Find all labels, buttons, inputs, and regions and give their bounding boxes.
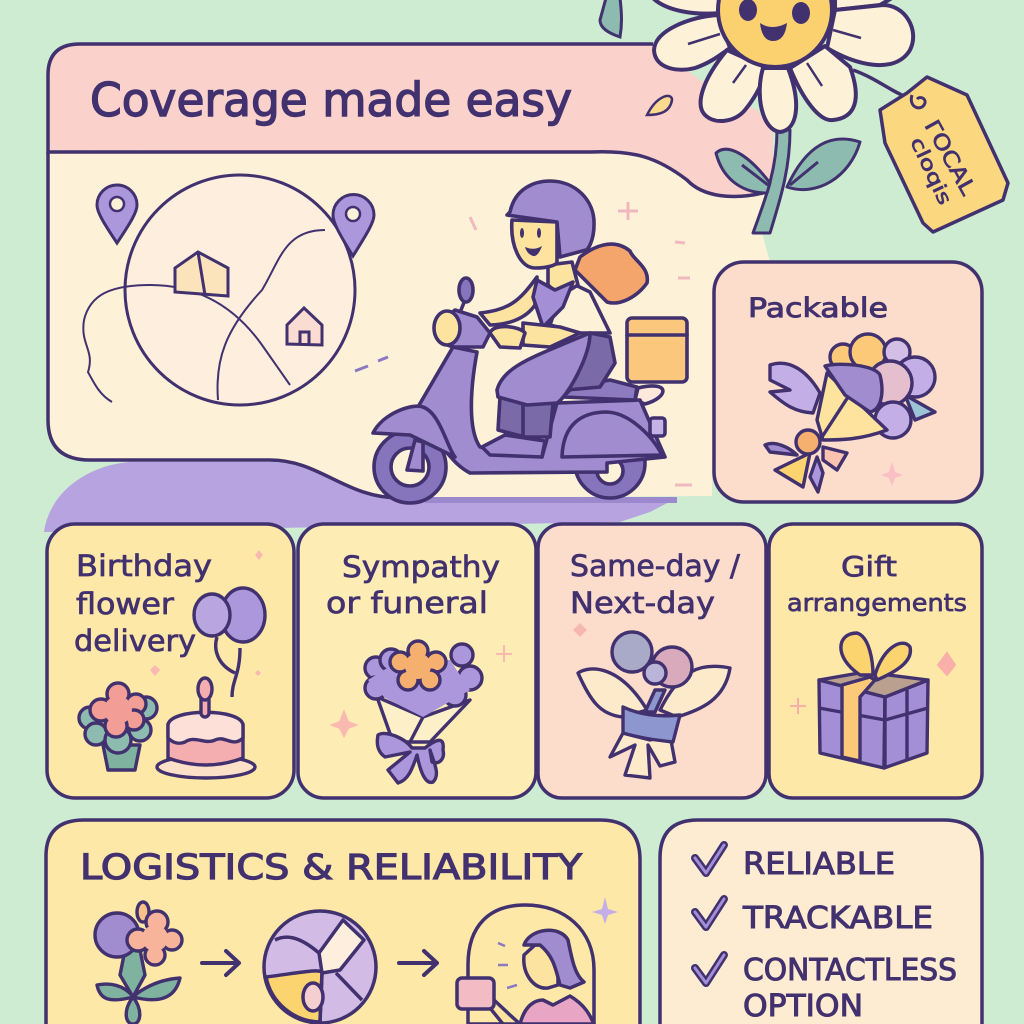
sparkles <box>332 645 512 736</box>
delivery box <box>627 318 687 382</box>
front fork <box>407 440 423 471</box>
icon: map pin left <box>97 185 137 243</box>
panel: packable <box>714 262 982 502</box>
tag text second line: cloqis <box>905 134 956 208</box>
icon: gift box <box>819 633 928 768</box>
sparkles <box>150 550 263 676</box>
icon: balloons <box>194 588 265 697</box>
flower face <box>718 0 832 67</box>
scooter body <box>418 347 665 473</box>
icon: bouquet <box>765 334 935 492</box>
label: delivery <box>74 624 196 658</box>
purple road swoosh <box>44 462 677 532</box>
panel: gift arrangements <box>769 524 982 798</box>
header band <box>48 44 773 197</box>
rear fender <box>562 412 662 457</box>
label: arrangements <box>787 589 967 617</box>
petal lines <box>688 30 861 86</box>
check item: contactless option <box>695 953 957 1024</box>
icon: winged bouquet <box>578 632 730 778</box>
map circle <box>83 175 355 405</box>
arrow <box>202 951 239 975</box>
tag text: ΓOCAL <box>920 116 981 199</box>
panel: birthday flower delivery <box>47 524 294 798</box>
headlight <box>434 311 460 345</box>
label: flower <box>76 587 174 621</box>
helmet <box>507 181 594 257</box>
hair <box>575 244 647 303</box>
hand <box>490 327 525 348</box>
label: or funeral <box>326 586 488 620</box>
scooter wheels <box>374 428 645 503</box>
eyes and smile <box>520 228 542 256</box>
panel: coverage map and courier <box>48 44 773 503</box>
icon: birthday cake <box>157 678 255 778</box>
icon: falling petal <box>647 96 672 115</box>
icon: house large <box>175 252 228 296</box>
stem and leaves <box>716 130 860 233</box>
sparkles <box>790 653 955 714</box>
check item: trackable: TRACKABLE <box>742 901 933 936</box>
dashed route <box>355 357 388 371</box>
mirror <box>459 278 473 310</box>
label: Next-day <box>570 586 715 620</box>
panel: sympathy or funeral <box>298 524 536 798</box>
apron <box>533 280 573 327</box>
icon: daisy mascot <box>650 0 913 233</box>
label: Birthday <box>76 549 212 583</box>
rider dark trousers <box>567 333 615 390</box>
sparkle <box>881 462 903 486</box>
scooter handlebar <box>438 310 490 347</box>
back arm <box>480 277 537 325</box>
scooter and rider <box>373 181 687 503</box>
icon: sympathy bouquet <box>365 641 482 783</box>
check item: contactless option: CONTACTLESS <box>743 953 957 988</box>
label: Sympathy <box>342 550 500 584</box>
front fender <box>373 406 455 457</box>
panel: same-day / next-day <box>538 524 766 798</box>
check item: reliable <box>695 845 895 882</box>
delivery box support <box>635 386 663 404</box>
icon: house small <box>287 308 322 345</box>
label: packable: Packable <box>748 293 888 324</box>
sparkles <box>470 202 692 485</box>
sparkles <box>573 623 587 637</box>
check item: reliable: RELIABLE <box>743 847 895 882</box>
rider lower legs <box>498 397 553 437</box>
front arm <box>523 323 580 347</box>
check item: contactless option: OPTION <box>743 989 863 1024</box>
arrow <box>399 951 437 975</box>
heading: Coverage made easy <box>90 73 572 127</box>
face <box>512 220 557 268</box>
rider boots <box>482 435 545 457</box>
tail light <box>650 418 665 436</box>
scooter seat <box>563 380 637 400</box>
icon: map pin right <box>333 194 374 256</box>
icon: flowers <box>95 902 182 1024</box>
sparkle <box>592 897 618 924</box>
icon: potted flower <box>79 683 157 770</box>
label: Gift <box>841 550 897 583</box>
panel: checklist <box>660 820 982 1024</box>
icon: leaf top <box>600 0 622 37</box>
shirt <box>550 280 610 333</box>
neck <box>548 262 578 296</box>
rider skirt <box>497 333 590 405</box>
panel: logistics and reliability <box>46 820 640 1024</box>
heading: LOGISTICS & RELIABILITY <box>80 848 583 888</box>
label: Same-day / <box>570 549 740 583</box>
road highlight <box>425 497 677 503</box>
check item: trackable <box>695 899 933 936</box>
icon: map circle <box>264 911 376 1023</box>
petals <box>650 0 913 132</box>
icon: person receiving parcel <box>457 905 594 1024</box>
price tag <box>853 70 1008 232</box>
